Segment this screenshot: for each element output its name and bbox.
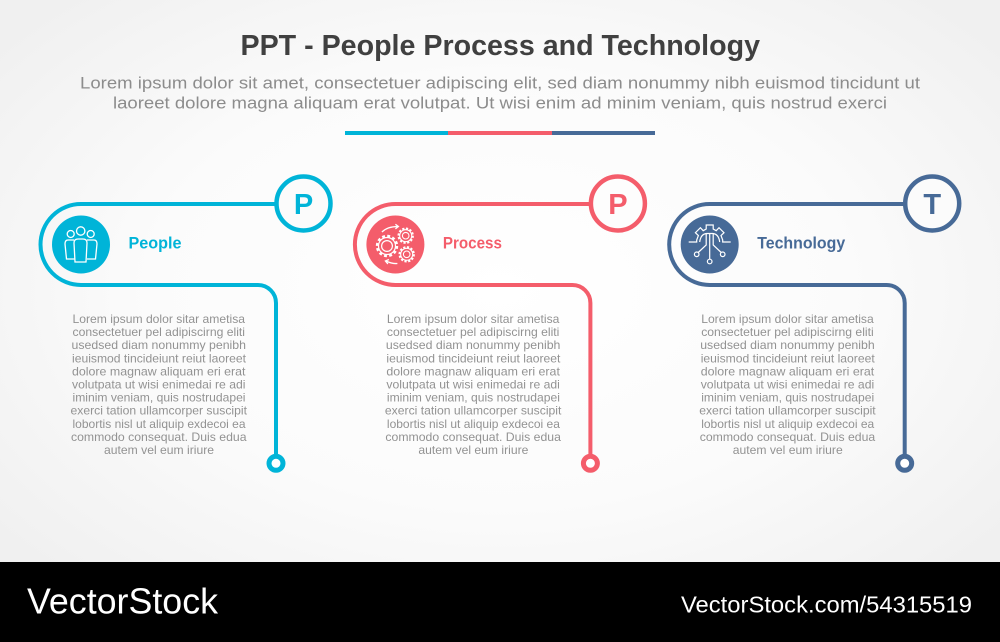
- end dot: [898, 456, 912, 470]
- subtitle text: Lorem ipsum dolor sit amet, consectetuer adipiscing elit, sed diam nonummy nibh euismod tincidunt ut: [80, 74, 920, 92]
- text block: process: autem vel eum iriure: [418, 444, 528, 457]
- end dot: [583, 456, 597, 470]
- connector line: technology: [669, 204, 905, 456]
- text block: process: usedsed diam nonummy penibh: [386, 339, 560, 352]
- text block: process: commodo consequat. Duis edua: [385, 431, 561, 444]
- text block: process: dolore magnaw aliquam eri erat: [386, 365, 561, 378]
- text block: technology: usedsed diam nonummy penibh: [700, 339, 875, 352]
- badge: letter P: [591, 176, 645, 230]
- badge: letter P: P: [294, 189, 313, 221]
- title: PPT - People Process and Technology: [240, 30, 760, 62]
- text block: process: lobortis nisl ut aliquip exdecoi ea: [387, 418, 560, 431]
- text block: technology: lobortis nisl ut aliquip exdecoi ea: [701, 418, 875, 431]
- text block: people: Lorem ipsum dolor sitar ametisa: [72, 313, 246, 326]
- heading: people: People: [128, 234, 182, 252]
- footer url: VectorStock.com/54315519: [681, 592, 972, 618]
- text block: technology: Lorem ipsum dolor sitar ametisa: [701, 313, 874, 326]
- heading: technology: Technology: [757, 234, 846, 252]
- text block: technology: iminim veniam, quis nostrudapei: [701, 392, 874, 405]
- footer logo: VectorStock: [27, 580, 219, 622]
- text block: people: commodo consequat. Duis edua: [71, 431, 247, 444]
- text block: technology: commodo consequat. Duis edua: [700, 431, 876, 444]
- title divider: [345, 131, 655, 135]
- text block: technology: dolore magnaw aliquam eri erat: [701, 365, 875, 378]
- text block: people: iminim veniam, quis nostrudapei: [72, 392, 246, 405]
- panel: technology: [669, 176, 959, 470]
- text block: people: [70, 313, 248, 457]
- panel: people: [40, 176, 330, 470]
- text block: technology: exerci tation ullamcorper suscipit: [699, 405, 877, 418]
- text block: people: lobortis nisl ut aliquip exdecoi ea: [72, 418, 246, 431]
- icon: technology: [681, 216, 739, 274]
- text block: process: consectetuer pel adipiscirng eliti: [387, 326, 559, 339]
- text block: people: volutpata ut wisi enimedai re adi: [72, 378, 246, 392]
- subtitle text: [80, 74, 920, 112]
- text block: people: usedsed diam nonummy penibh: [72, 339, 246, 352]
- text block: people: autem vel eum iriure: [104, 444, 214, 457]
- heading: process: Process: [443, 234, 502, 252]
- text block: technology: volutpata ut wisi enimedai re adi: [701, 378, 874, 392]
- badge: letter P: P: [608, 189, 628, 221]
- text block: people: exerci tation ullamcorper suscipit: [70, 405, 248, 418]
- badge: letter T: [905, 176, 959, 230]
- badge: letter P: [276, 176, 330, 230]
- subtitle text: laoreet dolore magna aliquam erat volutpat. Ut wisi enim ad minim veniam, quis nostrud exerci: [113, 94, 887, 112]
- text block: people: ieuismod tincideiunt reiut laoreet: [72, 352, 247, 365]
- text block: technology: autem vel eum iriure: [733, 444, 843, 457]
- connector line: process: [355, 204, 590, 456]
- end dot: [269, 456, 283, 470]
- text block: process: Lorem ipsum dolor sitar ametisa: [387, 313, 560, 326]
- badge: letter T: T: [923, 189, 941, 221]
- footer bar: [0, 562, 1000, 642]
- text block: process: ieuismod tincideiunt reiut laoreet: [386, 352, 561, 365]
- icon: people: [52, 216, 110, 274]
- icon: gears: [366, 216, 424, 274]
- panel: process: [355, 176, 645, 470]
- text block: people: consectetuer pel adipiscirng eliti: [72, 326, 245, 339]
- text block: technology: [699, 313, 877, 457]
- text block: process: [385, 313, 562, 457]
- text block: process: volutpata ut wisi enimedai re adi: [386, 378, 560, 392]
- text block: process: iminim veniam, quis nostrudapei: [387, 392, 560, 405]
- text block: process: exerci tation ullamcorper suscipit: [385, 405, 562, 418]
- text block: people: dolore magnaw aliquam eri erat: [72, 365, 246, 378]
- connector line: people: [40, 204, 276, 456]
- text block: technology: ieuismod tincideiunt reiut laoreet: [701, 352, 876, 365]
- text block: technology: consectetuer pel adipiscirng eliti: [701, 326, 874, 339]
